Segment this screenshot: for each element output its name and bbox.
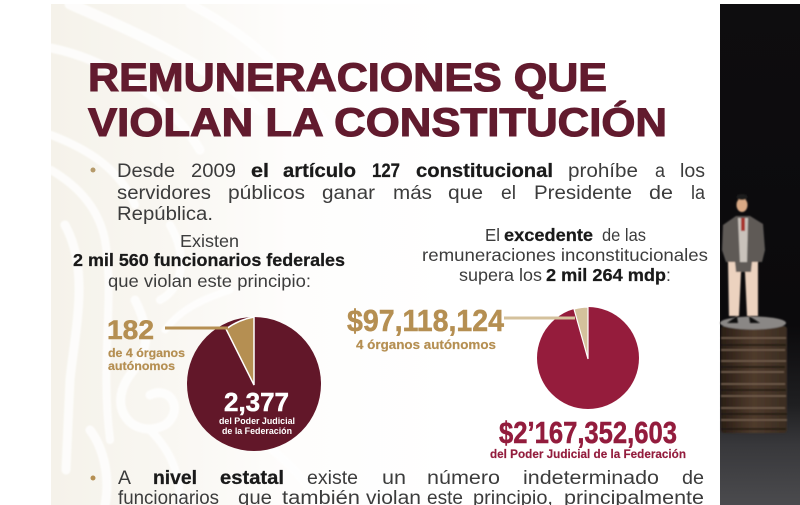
value: judiciary officials <box>219 387 295 437</box>
title <box>88 56 667 145</box>
state-level bullet text: A <box>118 468 131 489</box>
state-level bullet text <box>90 468 704 505</box>
intro bullet text: prohíbe <box>568 161 638 182</box>
intro bullet text: Desde <box>117 161 175 182</box>
left heading: federal officials <box>73 231 345 291</box>
title: VIOLAN LA CONSTITUCIÓN <box>88 99 667 145</box>
value: judiciary amount <box>490 415 686 461</box>
intro bullet text: servidores <box>117 183 211 204</box>
callout: 182 autonomous-body officials <box>107 315 228 373</box>
state-level bullet text: un <box>382 468 406 489</box>
coin stack <box>720 316 787 433</box>
right heading: surplus: excedente <box>504 225 593 245</box>
state-level bullet text: indeterminado <box>523 468 659 489</box>
callout: autonomous-body amount <box>347 303 575 352</box>
state-level bullet text: nivel <box>153 468 197 489</box>
state-level bullet text: existe <box>307 468 358 489</box>
intro bullet text: a <box>655 161 665 182</box>
value: judiciary officials: de la Federación <box>222 426 292 437</box>
intro bullet text: ganar <box>322 183 376 204</box>
state-level bullet text: estatal <box>220 468 284 489</box>
value: judiciary amount: $2’167,352,603 <box>499 415 677 450</box>
pie chart: officials <box>187 317 321 451</box>
title: REMUNERACIONES QUE <box>88 56 607 100</box>
right heading: surplus: de las <box>602 225 646 245</box>
callout: autonomous-body amount: 4 órganos autónomos <box>356 337 496 352</box>
right heading: surplus: : <box>666 265 671 285</box>
figurine <box>722 194 765 323</box>
intro bullet text <box>90 161 705 225</box>
pie chart: surplus amount <box>537 307 639 409</box>
intro bullet text: 127 <box>372 161 400 182</box>
left heading: federal officials: 2 mil 560 funcionarios federales <box>73 250 345 270</box>
intro bullet text: constitucional <box>416 161 553 182</box>
intro bullet text: el <box>251 161 269 182</box>
callout: 182 autonomous-body officials: 182 <box>107 315 154 345</box>
value: judiciary officials: del Poder Judicial <box>219 416 295 427</box>
value: judiciary amount: del Poder Judicial de la Federación <box>490 447 686 461</box>
intro bullet text: la <box>691 183 705 204</box>
intro bullet text: el <box>501 183 516 204</box>
intro bullet text: que <box>448 183 483 204</box>
callout: autonomous-body amount: $97,118,124 <box>347 303 505 338</box>
callout: 182 autonomous-body officials: de 4 órganos <box>108 346 185 360</box>
intro bullet text: públicos <box>228 183 305 204</box>
value: judiciary officials: 2,377 <box>224 387 289 417</box>
callout: 182 autonomous-body officials: autónomos <box>108 359 175 373</box>
state-level bullet text: número <box>427 468 500 489</box>
intro bullet text: 2009 <box>191 161 236 182</box>
left heading: federal officials: Existen <box>180 231 239 251</box>
intro bullet text: más <box>393 183 432 204</box>
right heading: surplus: remuneraciones inconstitucionales <box>422 245 708 265</box>
intro bullet text: Presidente <box>534 183 632 204</box>
intro bullet text: República. <box>117 204 213 225</box>
intro bullet text: artículo <box>283 161 356 182</box>
right heading: surplus: supera los <box>459 265 542 285</box>
right heading: surplus: 2 mil 264 mdp <box>546 265 666 285</box>
intro bullet text: los <box>680 161 705 182</box>
intro bullet text: de <box>649 183 673 204</box>
right heading: surplus: El <box>485 225 500 245</box>
photo: figurine on a stack of coins <box>720 4 800 505</box>
state-level bullet text: de <box>682 468 704 489</box>
right heading: surplus <box>422 225 708 285</box>
left heading: federal officials: que violan este principio: <box>108 271 311 291</box>
